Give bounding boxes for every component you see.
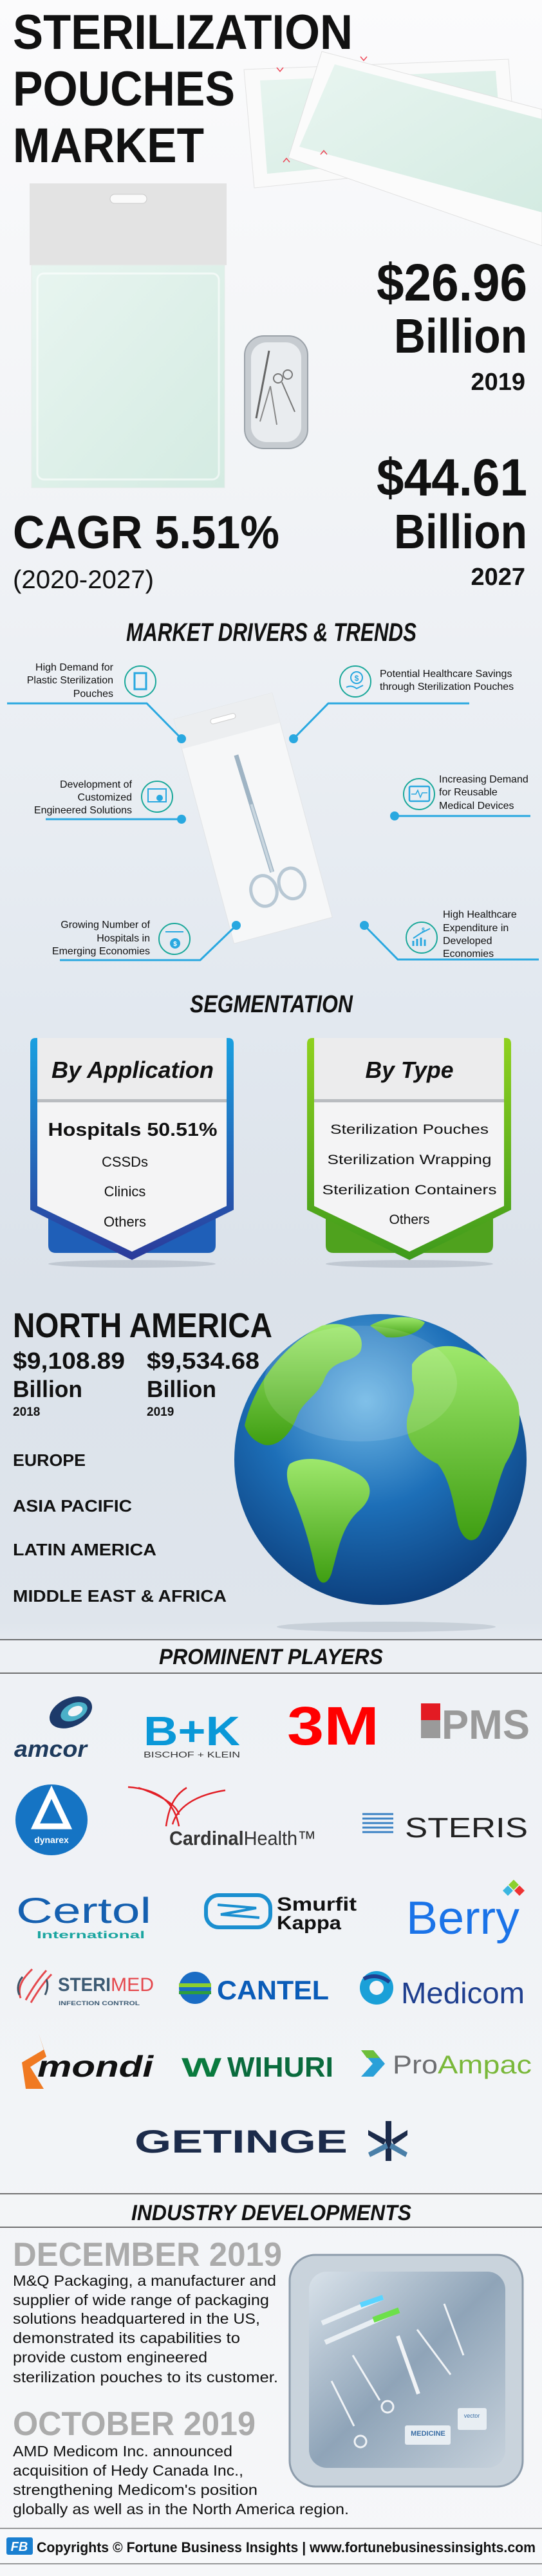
- logo: medicom: Medicom: [401, 1976, 525, 2010]
- driver: customized engineered solutions: Engineered Solutions: [34, 805, 132, 816]
- heading: market drivers: MARKET DRIVERS & TRENDS: [126, 618, 416, 647]
- heading band: industry developments: [0, 2194, 542, 2227]
- logo: certol international: [16, 1890, 151, 1941]
- icon: scale with coin: $: [173, 941, 177, 948]
- stat: 2019 market value: 2019: [471, 369, 525, 396]
- panel: by type: Others: [389, 1212, 430, 1227]
- illustration: instrument tray: [245, 336, 308, 449]
- list: other regions: LATIN AMERICA: [13, 1540, 156, 1559]
- icon: monitor: [404, 779, 435, 810]
- logo: proampac: Ampac: [438, 2051, 532, 2079]
- title: MARKET: [13, 118, 204, 173]
- panel: by type: By Type: [366, 1057, 453, 1083]
- logo: PMS: PMS: [442, 1701, 530, 1748]
- region: north america: Billion: [147, 1376, 216, 1402]
- driver: healthcare savings: [289, 666, 514, 743]
- logo: proampac: Pro: [393, 2051, 438, 2079]
- stat: 2027 market value: 2027: [471, 564, 525, 591]
- illustration: globe: [234, 1314, 527, 1632]
- logo: bischof + klein: B+K: [144, 1708, 240, 1754]
- panel: by type: Sterilization Pouches: [330, 1122, 489, 1137]
- icon: FBI logo: FB: [11, 2540, 28, 2554]
- driver: hospitals in emerging economies: Hospitals in: [97, 933, 150, 944]
- logo: sterimed: [18, 1969, 154, 2006]
- development: december 2019: sterilization pouches to its customer.: [13, 2369, 278, 2386]
- panel: by type: Sterilization Containers: [322, 1183, 497, 1198]
- panel: by application: Hospitals 50.51%: [48, 1120, 218, 1140]
- logo: smurfit kappa: Smurfit: [277, 1894, 357, 1915]
- logo: sterimed: STERI: [58, 1974, 111, 1996]
- development: december 2019: provide custom engineered: [13, 2349, 207, 2366]
- region: north america: $9,108.89: [13, 1348, 125, 1374]
- title: POUCHES: [13, 62, 235, 116]
- list: other regions: [13, 1450, 227, 1606]
- logo: steris: [362, 1812, 528, 1844]
- panel: by application: Clinics: [104, 1183, 145, 1200]
- list: other regions: EUROPE: [13, 1450, 86, 1470]
- development: october 2019: globally as well as in the North America region.: [13, 2501, 349, 2517]
- logo: dynarex: dynarex: [34, 1835, 69, 1845]
- driver: high demand for plastic pouches: Plastic Sterilization: [27, 675, 113, 686]
- icon: scale with coin: [159, 923, 190, 954]
- development: december 2019: M&Q Packaging, a manufacturer and: [13, 2272, 276, 2289]
- illustration: flat pouches: [244, 51, 542, 246]
- panel: by type: Sterilization Wrapping: [327, 1153, 492, 1167]
- stat: 2027 market value: $44.61: [377, 449, 527, 507]
- logo: proampac: [361, 2050, 532, 2079]
- logo: getinge: GETINGE: [135, 2124, 348, 2160]
- driver: high healthcare expenditure: Developed: [443, 936, 492, 947]
- illustration: surgical tray: [290, 2255, 523, 2487]
- region: north america: $9,534.68: [147, 1348, 259, 1374]
- driver: healthcare savings: through Sterilization Pouches: [380, 681, 514, 692]
- driver: customized engineered solutions: [34, 779, 186, 824]
- icon: dollar in hand: [340, 666, 371, 697]
- icon: engineer screen: [142, 781, 173, 812]
- title: [13, 5, 353, 173]
- development: october 2019: OCTOBER 2019: [13, 2405, 256, 2443]
- footer: [0, 2528, 542, 2564]
- logo: certol international: International: [37, 1930, 145, 1941]
- stat: 2027 market value: [377, 449, 527, 591]
- logo: cardinal health: CardinalHealth™: [169, 1827, 316, 1849]
- driver: high demand for plastic pouches: [7, 662, 186, 743]
- development: october 2019: AMD Medicom Inc. announced: [13, 2443, 232, 2460]
- logo: wihuri: [182, 2052, 333, 2083]
- icon: rising chart: [406, 922, 437, 953]
- development: december 2019: [13, 2236, 282, 2386]
- development: december 2019: supplier of wide range of packaging: [13, 2292, 269, 2308]
- driver: reusable medical devices: [390, 774, 530, 820]
- heading band: prominent players: PROMINENT PLAYERS: [159, 1645, 383, 1669]
- stat: 2019 market value: [377, 254, 527, 396]
- heading: segmentation: SEGMENTATION: [190, 991, 353, 1018]
- logo: 3M: 3M: [287, 1696, 379, 1756]
- development: december 2019: DECEMBER 2019: [13, 2236, 282, 2274]
- development: october 2019: [13, 2405, 349, 2517]
- title: STERILIZATION: [13, 5, 353, 60]
- panel: by application: Others: [104, 1214, 146, 1230]
- logo: getinge: [135, 2121, 407, 2161]
- stat: 2019 market value: Billion: [394, 309, 527, 363]
- stat: CAGR: (2020-2027): [13, 566, 154, 594]
- illustration: hanging bag: [30, 183, 227, 488]
- region: north america: 2018: [13, 1405, 40, 1419]
- driver: high healthcare expenditure: Expenditure in: [443, 923, 509, 934]
- driver: healthcare savings: Potential Healthcare Savings: [380, 669, 512, 680]
- logo: dynarex: [15, 1784, 88, 1855]
- icon: FBI logo: [6, 2537, 33, 2555]
- region: north america: Billion: [13, 1376, 82, 1402]
- logo: smurfit kappa: [206, 1894, 357, 1934]
- stat: 2019 market value: $26.96: [377, 254, 527, 312]
- logo: sterimed: MED: [111, 1974, 154, 1996]
- driver: high healthcare expenditure: [360, 909, 539, 959]
- region: north america: 2019: [147, 1405, 174, 1419]
- logo: steris: STERIS: [405, 1812, 528, 1844]
- development: october 2019: strengthening Medicom's position: [13, 2481, 257, 2498]
- icon: dollar in hand: $: [355, 674, 359, 683]
- driver: high demand for plastic pouches: High Demand for: [35, 662, 114, 673]
- list: other regions: MIDDLE EAST & AFRICA: [13, 1586, 227, 1606]
- logo: bischof + klein: BISCHOF + KLEIN: [144, 1750, 240, 1759]
- driver: high healthcare expenditure: High Healthcare: [443, 909, 517, 920]
- logo: sterimed: INFECTION CONTROL: [59, 2000, 140, 2006]
- region: north america: NORTH AMERICA: [13, 1306, 272, 1345]
- development: december 2019: solutions headquartered in the US,: [13, 2310, 260, 2327]
- logo: amcor: [14, 1690, 97, 1762]
- driver: hospitals in emerging economies: Growing Number of: [61, 920, 151, 931]
- driver: reusable medical devices: Increasing Demand: [439, 774, 528, 785]
- development: december 2019: demonstrated its capabilities to: [13, 2330, 240, 2346]
- list: other regions: ASIA PACIFIC: [13, 1496, 132, 1515]
- logo: berry: Berry: [406, 1893, 519, 1944]
- panel: by application: CSSDs: [102, 1154, 148, 1170]
- illustration: surgical tray: vector: [464, 2413, 480, 2419]
- logo: cantel: CANTEL: [217, 1975, 329, 2005]
- driver: reusable medical devices: Medical Devices: [439, 801, 514, 811]
- logo: smurfit kappa: Kappa: [277, 1913, 341, 1934]
- stat: CAGR: CAGR 5.51%: [13, 507, 279, 559]
- driver: hospitals in emerging economies: Emerging Economies: [52, 946, 150, 957]
- logo: cantel: [179, 1972, 329, 2005]
- illustration: surgical tray: MEDICINE: [411, 2430, 445, 2438]
- logo: wihuri: WIHURI: [227, 2052, 333, 2083]
- driver: high healthcare expenditure: Economies: [443, 949, 494, 959]
- icon: rising chart: $: [422, 927, 425, 933]
- stat: 2027 market value: Billion: [394, 505, 527, 559]
- region: north america: [13, 1306, 272, 1419]
- heading band: industry developments: INDUSTRY DEVELOPMENTS: [131, 2201, 411, 2225]
- icon: pouch: [125, 666, 156, 697]
- logo: medicom: [360, 1971, 525, 2010]
- logo: mondi: mondi: [37, 2050, 154, 2083]
- stat: CAGR: [13, 507, 279, 594]
- panel: by type: [307, 1038, 511, 1268]
- logo: cardinal health: [128, 1787, 316, 1849]
- footer: Copyrights © Fortune Business Insights | www.fortunebusinessinsights.com: [37, 2539, 536, 2555]
- driver: customized engineered solutions: Customized: [78, 792, 132, 803]
- logo: certol international: Certol: [16, 1890, 151, 1931]
- logo: mondi: [22, 2034, 154, 2089]
- driver: high demand for plastic pouches: Pouches: [73, 689, 113, 700]
- panel: by application: By Application: [51, 1057, 214, 1083]
- logo: wihuri: W: [182, 2052, 222, 2082]
- driver: reusable medical devices: for Reusable: [439, 787, 498, 798]
- logo: amcor: amcor: [14, 1736, 88, 1762]
- driver: customized engineered solutions: Development of: [60, 779, 133, 790]
- panel: by application: [30, 1038, 234, 1268]
- heading band: prominent players: [0, 1640, 542, 1673]
- illustration: pouch with scissors: [174, 693, 332, 943]
- driver: hospitals in emerging economies: [52, 920, 241, 960]
- development: october 2019: acquisition of Hedy Canada Inc.,: [13, 2462, 243, 2479]
